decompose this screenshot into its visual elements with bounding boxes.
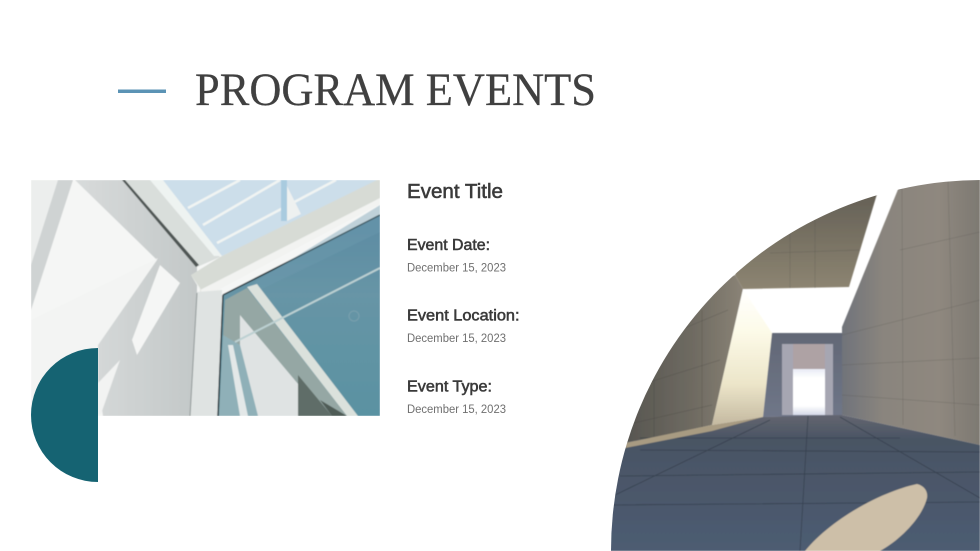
photo: concrete corridor in circle [600,175,980,551]
end wall [763,333,842,417]
sunlit wall [712,289,772,425]
event date [407,237,506,274]
title accent line [118,90,166,93]
event type: Event Type: [407,378,492,396]
teal half circle [31,348,98,482]
event date: Event Date: [407,237,490,254]
title: PROGRAM EVENTS [195,64,596,116]
photo: glass building corner [31,180,380,416]
event type [407,378,506,416]
event title: Event Title [407,181,503,203]
roof beam [122,180,220,267]
sunlight patch on floor [805,484,927,551]
window frame [190,290,222,416]
skylight [150,180,380,256]
event type: December 15, 2023 [407,404,506,416]
right wall [842,175,980,445]
event location: December 15, 2023 [407,333,506,345]
sunlight strip [620,417,763,449]
shadowed wall section [75,180,197,416]
interior reflection [219,288,347,416]
event location: Event Location: [407,308,520,324]
horizontal beam [191,180,380,298]
event location [407,308,520,345]
event details [407,181,520,416]
ceiling slab [734,195,878,290]
white diagonal mullion [247,284,358,416]
left wall [620,275,743,445]
event date: December 15, 2023 [407,262,506,274]
glass pane [218,215,380,416]
floor [600,415,980,551]
